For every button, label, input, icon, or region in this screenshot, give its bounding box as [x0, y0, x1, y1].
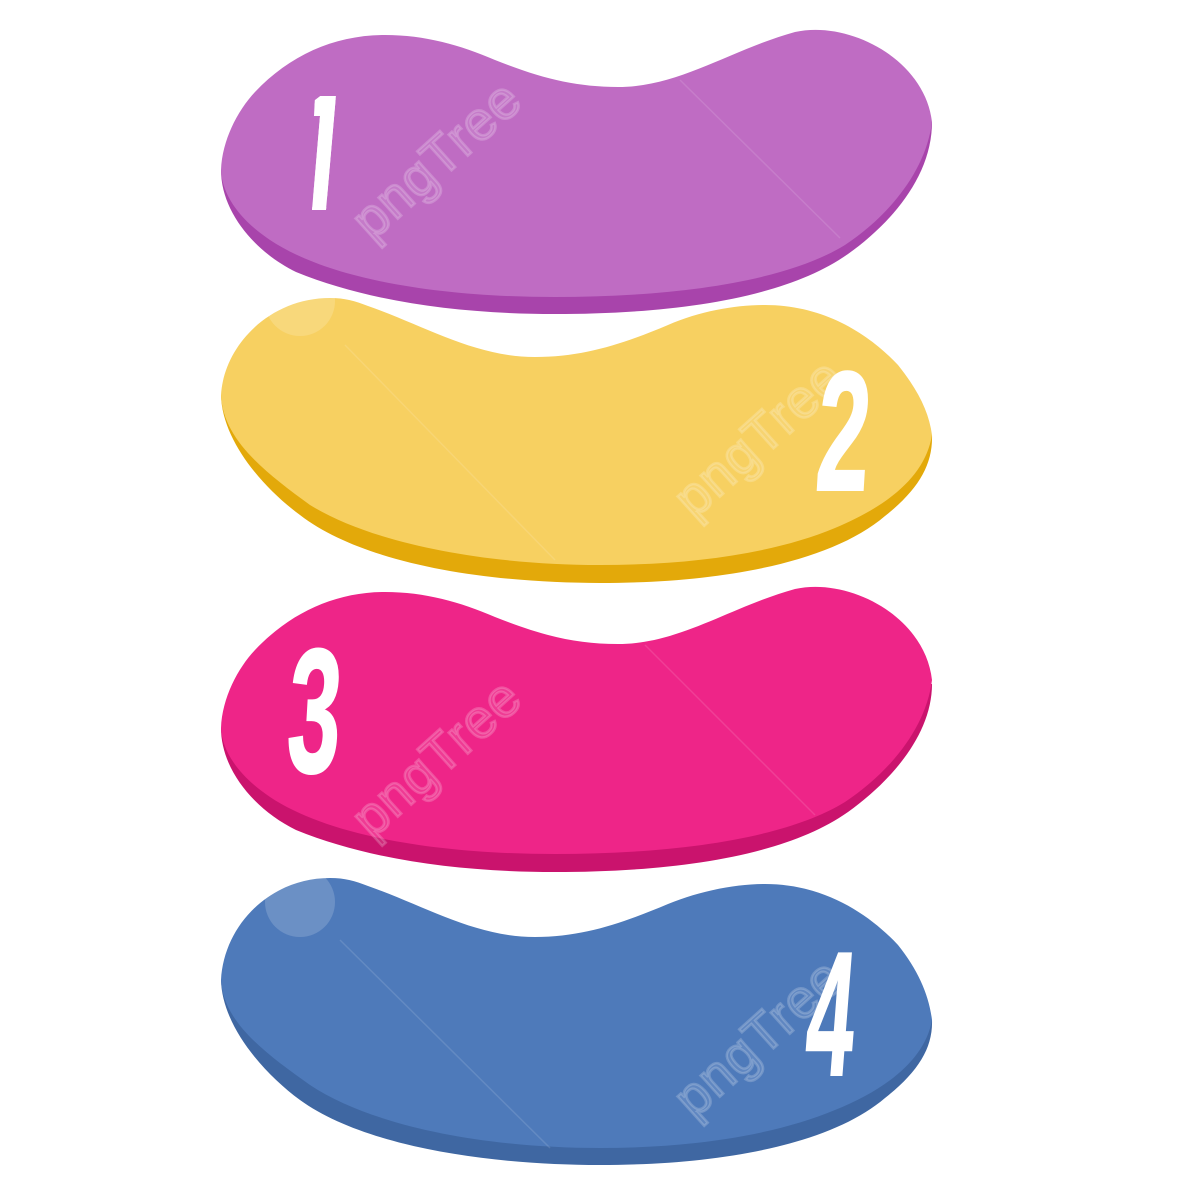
watermark: pngtree blue: pngTree: [662, 946, 855, 1129]
panel: blob 2 yellow: [221, 266, 932, 583]
icon: watermark circle blue: [265, 867, 335, 937]
panel: blob 4 blue: [221, 867, 932, 1165]
watermark: pngtree purple: pngTree: [340, 68, 533, 251]
panel: blob 3 pink: [221, 587, 932, 872]
number 4: 4: [800, 916, 862, 1113]
watermark: pngtree pink: pngTree: [340, 666, 533, 849]
number 3: 3: [283, 613, 347, 811]
number 1: 1: [277, 64, 364, 244]
watermark: pngtree yellow: pngTree: [662, 346, 855, 529]
panel: blob 1 purple: [221, 30, 932, 314]
number 2: 2: [812, 337, 876, 527]
icon: watermark circle yellow: [265, 266, 335, 336]
